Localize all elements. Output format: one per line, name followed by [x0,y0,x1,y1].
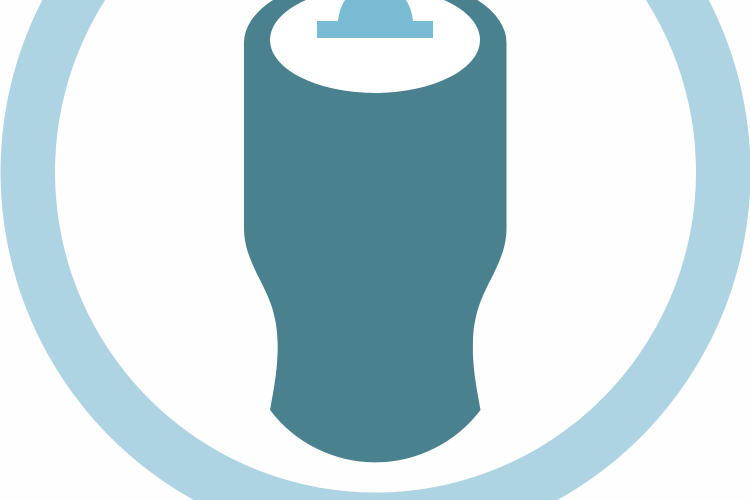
glass body [244,0,507,462]
liquid surface dome and base [317,0,433,38]
glass opening [270,0,480,93]
